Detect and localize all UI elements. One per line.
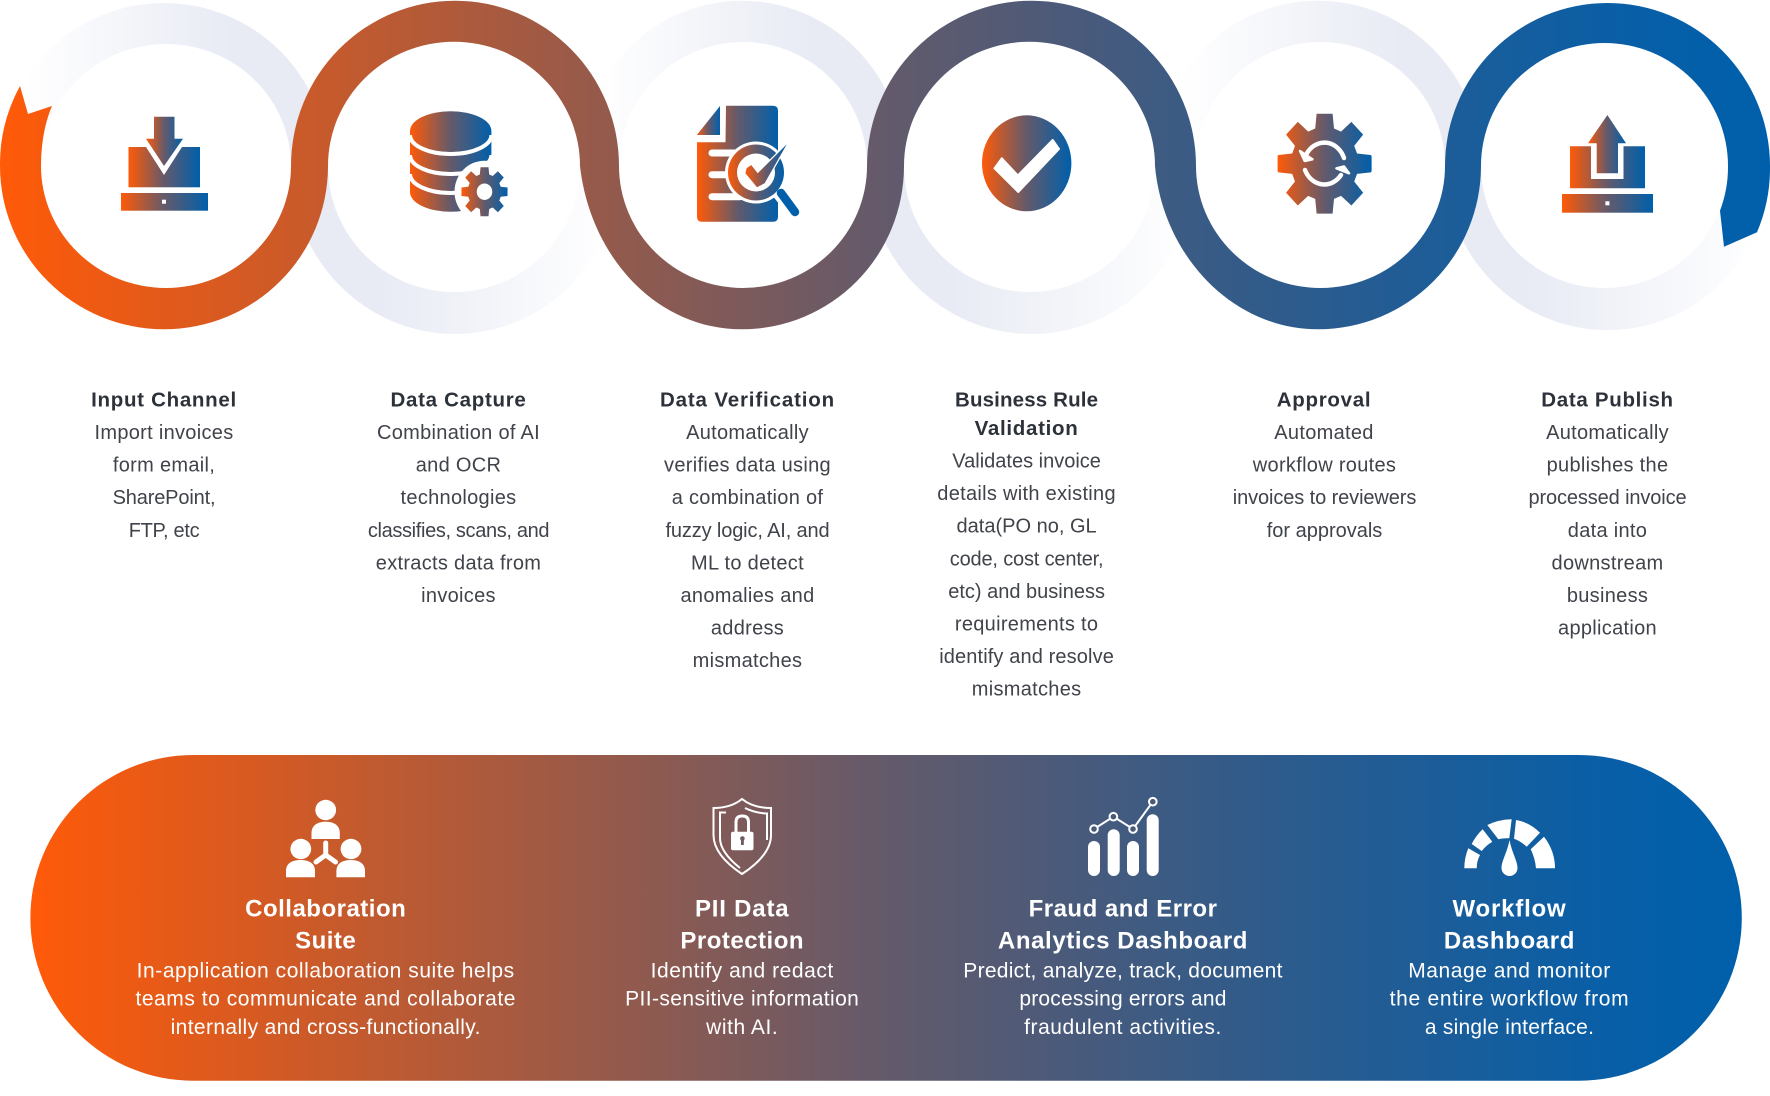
description: processed invoice [1528,487,1687,509]
description: Automated [1274,422,1374,444]
description: a combination of [672,487,823,509]
icon: approval gear [1278,114,1372,214]
description: Combination of AI [377,422,540,444]
heading: Input Channel [91,389,237,412]
description: processing errors and [1019,988,1227,1011]
step: Input Channel [91,389,237,542]
description: technologies [401,487,516,509]
description: PII-sensitive information [625,988,859,1011]
description: details with existing [937,483,1116,505]
description: anomalies and [680,585,814,607]
description: data(PO no, GL [957,516,1097,538]
heading: Data Verification [660,389,835,412]
description: teams to communicate and collaborate [135,988,516,1011]
description: extracts data from [376,552,541,574]
heading: Fraud and Error [1029,896,1217,923]
heading: PII Data [695,896,789,923]
description: address [711,618,784,640]
heading: Business Rule [955,389,1098,412]
description: invoices [421,585,496,607]
description: with AI. [705,1016,778,1039]
description: fuzzy logic, AI, and [666,520,829,542]
description: identify and resolve [939,646,1114,668]
icon: download to laptop [121,117,208,211]
description: etc) and business [948,581,1105,603]
description: ML to detect [691,552,804,574]
step: Data Publish [1528,389,1687,640]
description: FTP, etc [129,520,200,542]
description: Import invoices [94,422,234,444]
description: Manage and monitor [1408,960,1611,983]
heading: Data Capture [390,389,526,412]
description: Predict, analyze, track, document [963,960,1283,983]
step: Data Verification [660,389,835,672]
heading: Analytics Dashboard [998,927,1248,954]
panel background pill [30,755,1742,1081]
description: Automatically [1546,422,1669,444]
icon: gauge [1464,819,1555,876]
feature: PII Data Protection [625,799,859,1039]
description: requirements to [955,614,1098,636]
heading: Validation [975,417,1079,440]
description: application [1558,618,1657,640]
heading: Dashboard [1444,927,1575,954]
pale background arcs [0,1,1770,334]
description: code, cost center, [950,548,1103,570]
feature: Collaboration Suite [135,800,516,1039]
description: verifies data using [664,455,831,477]
description: data into [1568,520,1647,542]
icon: database with gear [410,111,522,223]
description: fraudulent activities. [1024,1016,1222,1039]
icon: shield with padlock [714,799,771,874]
description: a single interface. [1425,1016,1594,1039]
description: SharePoint, [113,487,215,509]
description: internally and cross-functionally. [171,1016,481,1039]
description: downstream [1552,552,1663,574]
heading: Approval [1277,389,1371,412]
description: workflow routes [1252,455,1396,477]
description: mismatches [693,650,802,672]
feature: Workflow Dashboard [1390,819,1629,1039]
icon: team collaboration [286,800,365,877]
icon: document verification [697,106,797,222]
heading: Data Publish [1541,389,1674,412]
wave ribbon [0,1,1770,334]
description: Validates invoice [952,450,1101,472]
step: Data Capture [368,389,549,607]
heading: Suite [295,927,356,954]
description: form email, [113,455,215,477]
heading: Collaboration [245,896,406,923]
description: Automatically [686,422,809,444]
description: In-application collaboration suite helps [137,960,515,983]
icon: analytics chart [1088,798,1159,876]
description: business [1567,585,1648,607]
description: classifies, scans, and [368,520,549,542]
icon: upload from laptop [1562,115,1653,213]
panel: platform features [30,755,1742,1081]
icon: check mark badge [982,115,1071,211]
heading: Workflow [1453,896,1566,923]
description: the entire workflow from [1390,988,1629,1011]
description: mismatches [972,679,1081,701]
coloured gradient arrow ribbon [0,1,1770,329]
description: invoices to reviewers [1233,487,1416,509]
heading: Protection [680,927,804,954]
feature: Fraud and Error Analytics Dashboard [963,798,1283,1039]
step: Approval [1233,389,1416,542]
description: for approvals [1267,520,1382,542]
description: publishes the [1547,455,1668,477]
step: Business Rule Validation [937,389,1116,701]
description: and OCR [416,455,501,477]
description: Identify and redact [651,960,834,983]
